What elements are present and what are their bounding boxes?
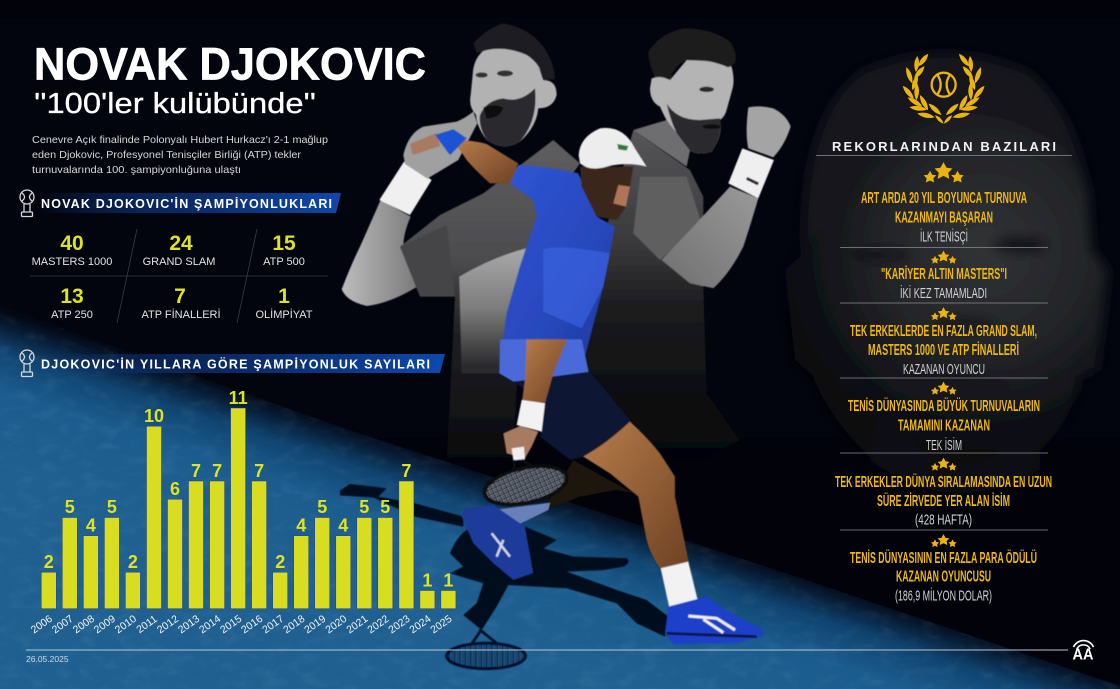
bar values: 5 xyxy=(107,497,117,517)
year labels: 2021 xyxy=(344,613,370,636)
bar values: 5 xyxy=(65,497,75,517)
bar values: 7 xyxy=(401,461,411,481)
date: 26.05.2025 xyxy=(26,654,69,664)
year labels: 2008 xyxy=(71,613,97,636)
record 5 xyxy=(835,458,1052,530)
front leg xyxy=(583,422,689,568)
bar values: 6 xyxy=(170,479,180,499)
bar values xyxy=(44,388,453,590)
player cap xyxy=(579,128,647,169)
record 1 xyxy=(840,162,1048,248)
intro paragraph: turnuvalarında 100. şampiyonluğuna ulaştı xyxy=(32,164,241,176)
bar values: 1 xyxy=(422,570,432,590)
player lower arm xyxy=(522,339,567,403)
year labels: 2016 xyxy=(239,613,265,636)
stat: olympics xyxy=(255,285,313,321)
bar values: 7 xyxy=(212,461,222,481)
record 4 xyxy=(840,382,1048,454)
tennis court xyxy=(0,300,1120,689)
title: NOVAK DJOKOVIC xyxy=(34,38,426,90)
right greyscale portrait xyxy=(580,28,791,460)
white sock xyxy=(661,562,699,611)
icon: trophy xyxy=(20,350,34,376)
bar values: 4 xyxy=(296,516,306,536)
record 3: MASTERS 1000 VE ATP FİNALLERİ xyxy=(868,342,1019,359)
racket xyxy=(481,447,570,511)
shirt hem xyxy=(499,339,589,382)
stat: masters: 40 xyxy=(60,232,84,255)
intro paragraph: Cenevre Açık finalinde Polonyalı Hubert Hurkacz'ı 2-1 mağlup xyxy=(32,134,328,146)
record 2 xyxy=(840,251,1048,303)
left wristband xyxy=(379,162,432,215)
record 2: "KARİYER ALTIN MASTERS"I xyxy=(881,266,1007,283)
icon: trophy xyxy=(20,190,34,216)
year labels: 2014 xyxy=(197,613,223,636)
bar values: 5 xyxy=(317,497,327,517)
year labels: 2017 xyxy=(260,613,286,636)
record 4: TAMAMINI KAZANAN xyxy=(898,418,990,434)
right wristband xyxy=(728,148,774,198)
section heading: titles: NOVAK DJOKOVIC'İN ŞAMPİYONLUKLARI xyxy=(41,196,332,211)
stat: atp finals: 7 xyxy=(174,285,186,308)
left greyscale portrait xyxy=(342,23,580,460)
year labels: 2011 xyxy=(134,613,160,636)
bar values: 7 xyxy=(254,461,264,481)
year labels: 2023 xyxy=(386,613,413,636)
bar values: 2 xyxy=(44,552,54,572)
bar values: 5 xyxy=(359,497,369,517)
shorts xyxy=(513,372,632,460)
bar values: 4 xyxy=(338,516,348,536)
year labels xyxy=(29,613,455,636)
record 5: SÜRE ZİRVEDE YER ALAN İSİM xyxy=(877,493,1010,510)
front shoe xyxy=(665,597,763,644)
intro paragraph: eden Djokovic, Profesyonel Tenisçiler Birliği (ATP) tekler xyxy=(32,149,302,161)
ghost portrait behind records xyxy=(785,54,1108,493)
tennis ball xyxy=(932,73,956,97)
stat: atp finals xyxy=(141,285,221,321)
record 3 xyxy=(840,307,1048,378)
intro paragraph xyxy=(32,134,328,176)
stat: atp 500: ATP 500 xyxy=(263,256,305,268)
bar values: 11 xyxy=(229,388,248,408)
year labels: 2022 xyxy=(365,613,391,636)
stat: grand slam: GRAND SLAM xyxy=(143,256,215,268)
right torso xyxy=(580,130,740,460)
player arm xyxy=(453,140,518,183)
year labels: 2025 xyxy=(428,613,455,636)
stat: olympics: OLİMPİYAT xyxy=(255,308,313,321)
year labels: 2020 xyxy=(323,613,349,636)
right sleeve xyxy=(633,177,702,260)
section heading: yearly titles xyxy=(35,354,445,373)
record 3: KAZANAN OYUNCU xyxy=(903,361,985,378)
bar values: 10 xyxy=(144,406,164,426)
icon: laurel wreath xyxy=(901,52,986,125)
bar values: 7 xyxy=(191,461,201,481)
rear leg xyxy=(547,460,633,510)
section heading: yearly titles: DJOKOVIC'İN YILLARA GÖRE ŞAMPİYONLUK SAYILARI xyxy=(41,356,430,372)
stat: olympics: 1 xyxy=(278,285,290,308)
year labels: 2012 xyxy=(155,613,181,636)
right fist xyxy=(747,106,791,157)
player hand lower xyxy=(503,426,538,458)
year labels: 2013 xyxy=(176,613,202,636)
record 5: (428 HAFTA) xyxy=(915,512,972,528)
bar values: 1 xyxy=(443,570,453,590)
rear sock xyxy=(493,503,550,525)
stat: atp 500 xyxy=(263,232,305,268)
right arm xyxy=(662,187,758,288)
player face xyxy=(580,167,633,220)
record 6: KAZANAN OYUNCUSU xyxy=(896,568,991,586)
stat: atp finals: ATP FİNALLERİ xyxy=(141,308,221,321)
player hand xyxy=(410,133,440,155)
record 2: İKİ KEZ TAMAMLADI xyxy=(900,284,987,302)
year labels: 2009 xyxy=(92,613,118,636)
stat: masters: MASTERS 1000 xyxy=(32,256,112,268)
stat: atp 250: 13 xyxy=(60,285,84,308)
footer rule xyxy=(26,649,1068,651)
year labels: 2007 xyxy=(50,613,76,636)
stats grid xyxy=(30,229,328,323)
year labels: 2015 xyxy=(218,613,244,636)
stat: atp 250: ATP 250 xyxy=(51,309,93,321)
record 1: İLK TENİSÇİ xyxy=(920,228,968,246)
player shirt xyxy=(500,165,615,363)
stat: masters xyxy=(32,232,112,268)
left head xyxy=(470,47,557,146)
central player in colour xyxy=(410,128,763,644)
year labels: 2006 xyxy=(29,613,55,636)
stat: grand slam xyxy=(143,232,215,268)
year labels: 2018 xyxy=(281,613,307,636)
year labels: 2010 xyxy=(113,613,139,636)
year labels: 2024 xyxy=(407,613,434,636)
white wristband xyxy=(517,400,545,432)
bar values: 5 xyxy=(380,497,390,517)
bar chart xyxy=(29,388,456,636)
blue wristband xyxy=(435,129,467,155)
left shirt xyxy=(400,140,580,460)
section heading: titles xyxy=(35,193,341,213)
left fist xyxy=(403,112,477,179)
subtitle: ''100'ler kulübünde'' xyxy=(34,88,316,120)
record 1: KAZANMAYI BAŞARAN xyxy=(895,210,993,226)
bar values: 2 xyxy=(128,552,138,572)
player shadow on court xyxy=(340,484,668,669)
bar values: 4 xyxy=(86,516,96,536)
record 6: (186,9 MİLYON DOLAR) xyxy=(895,586,992,604)
right head xyxy=(650,60,734,154)
rear shoe xyxy=(462,505,533,580)
bar values: 2 xyxy=(275,552,285,572)
record 6 xyxy=(850,534,1037,604)
logo: AA: AA xyxy=(1072,646,1094,664)
record 4: TEK İSİM xyxy=(926,436,962,454)
year labels: 2019 xyxy=(302,613,328,636)
stat: grand slam: 24 xyxy=(169,232,193,255)
left arm xyxy=(342,200,417,306)
records heading: REKORLARINDAN BAZILARI xyxy=(832,139,1056,154)
stat: atp 500: 15 xyxy=(272,232,296,255)
stat: atp 250 xyxy=(51,285,93,321)
